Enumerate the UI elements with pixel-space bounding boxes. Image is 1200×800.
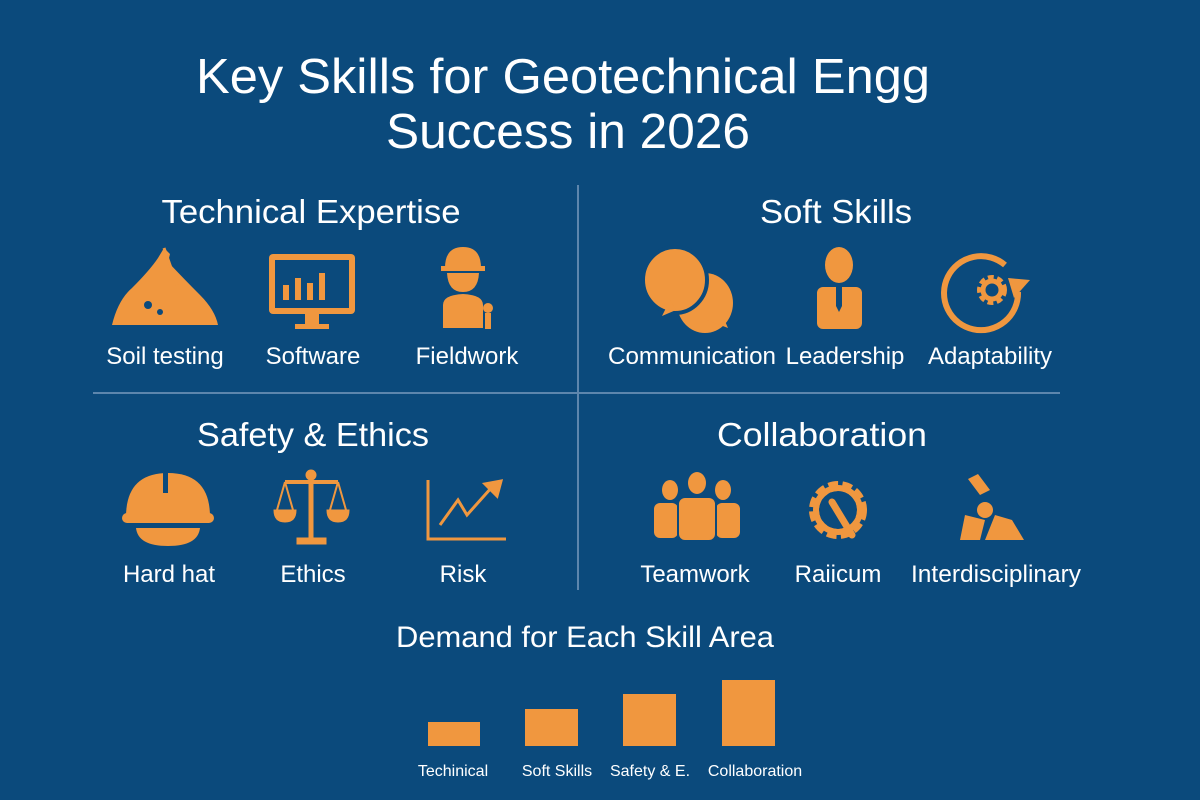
panel: collaboration: Raiicum (795, 561, 881, 588)
labels: collaboration: Teamwork (640, 561, 751, 588)
labels: safety: Hard hat (123, 561, 215, 588)
heading: technical expertise: Technical Expertise (162, 193, 460, 230)
labels: soft skills: Communication (608, 343, 776, 370)
heading: safety: Safety & Ethics (197, 416, 429, 453)
icon: soil pile (112, 248, 218, 325)
panel: technical expertise: Fieldwork (416, 343, 519, 370)
icon: software monitor (269, 254, 355, 329)
icon: gear wrench (814, 486, 862, 535)
icon: adaptability gear (944, 256, 1030, 330)
bar chart: demand (396, 621, 802, 780)
icon: scales (274, 470, 349, 544)
panel: safety & ethics (122, 416, 506, 588)
title (196, 50, 930, 159)
icon: leadership person (817, 247, 862, 329)
title: Success in 2026 (386, 105, 750, 159)
icon: hard hat (122, 473, 214, 546)
panel: safety & ethics: Risk (440, 561, 487, 588)
panel: technical expertise: Software (266, 343, 360, 370)
panel: safety & ethics: Ethics (280, 561, 346, 588)
panel: soft skills: Leadership (786, 343, 904, 370)
heading: collaboration: Collaboration (717, 416, 927, 453)
panel: collaboration (640, 416, 1081, 588)
icon: fieldwork worker (441, 247, 493, 329)
panel: soft skills (608, 193, 1052, 370)
title: Key Skills for Geotechnical Engg (196, 50, 930, 104)
heading: soft skills: Soft Skills (760, 193, 912, 230)
bar chart: demand: Collaboration (708, 763, 802, 780)
chart title: Demand for Each Skill Area (396, 621, 774, 654)
panel: technical expertise (106, 193, 519, 370)
icon: risk chart (428, 480, 506, 539)
icon: interdisciplinary (960, 474, 1024, 540)
bar chart: demand: Techinical (418, 763, 488, 780)
labels: technical: Soil testing (106, 343, 224, 370)
panel: collaboration: Interdisciplinary (911, 561, 1081, 588)
icon: teamwork (654, 472, 740, 541)
bar chart: demand: Soft Skills (522, 763, 592, 780)
panel: soft skills: Adaptability (928, 343, 1052, 370)
bar chart: demand: Safety & E. (610, 763, 690, 780)
icon: speech bubbles (643, 247, 733, 333)
